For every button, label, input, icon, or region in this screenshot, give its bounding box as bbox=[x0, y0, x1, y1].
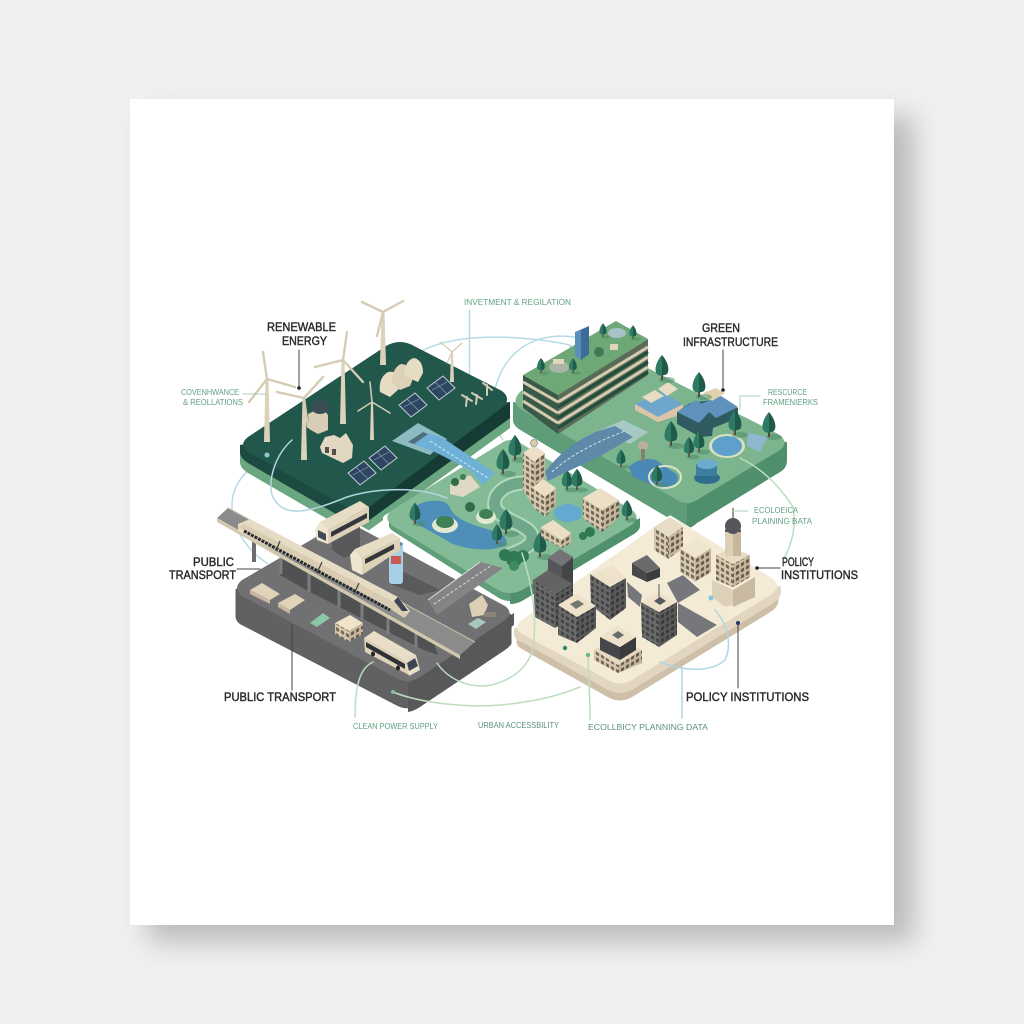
office block f bbox=[654, 517, 683, 559]
label: governance and regulations: COVENHWANCE bbox=[181, 388, 239, 397]
park trees bbox=[617, 355, 782, 487]
blue greenhouse buildings bbox=[677, 388, 738, 437]
city towers bbox=[523, 440, 619, 548]
heading: green infrastructure: GREEN bbox=[702, 321, 740, 335]
heading: policy institutions side: INSTITUTIONS bbox=[781, 568, 858, 582]
platform: renewable energy bbox=[240, 301, 510, 534]
high speed train bbox=[238, 519, 410, 618]
label: ecological planning data side: ECOLOEICA bbox=[754, 506, 799, 515]
heading: renewable energy: RENEWABLE bbox=[267, 320, 336, 334]
platform: central city park bbox=[386, 435, 640, 604]
heading: policy institutions side: POLICY bbox=[782, 555, 814, 569]
water bridges bbox=[392, 420, 648, 485]
central trees bbox=[410, 435, 637, 560]
label: ecological planning data bottom: ECOLLBICY PLANNING DATA bbox=[588, 723, 709, 732]
blue arc policy bbox=[660, 596, 728, 718]
platform small buildings bbox=[250, 583, 363, 642]
beige small plant bbox=[320, 433, 353, 463]
green label ticks bbox=[243, 394, 760, 511]
label: resource frameworks: RESCURCE bbox=[768, 388, 807, 397]
ramp road bbox=[428, 562, 503, 615]
bridge left bbox=[392, 423, 495, 485]
viaduct deck bbox=[217, 508, 475, 659]
billboard column bbox=[389, 542, 440, 595]
label: clean power supply: CLEAN POWER SUPPLY bbox=[353, 722, 439, 731]
heading: policy institutions bottom: POLICY INSTITUTIONS bbox=[686, 690, 809, 704]
central pond bbox=[410, 501, 582, 550]
small dark block bbox=[632, 555, 660, 582]
winding road bbox=[495, 483, 532, 556]
platform: policy institutions bbox=[514, 508, 781, 703]
solar panels bbox=[348, 376, 455, 485]
satellite dish building bbox=[308, 400, 329, 434]
rooftop details bbox=[537, 323, 640, 375]
label: resource frameworks: FRAMENIERKS bbox=[763, 398, 818, 407]
dark block e bbox=[641, 584, 677, 647]
bridge right bbox=[545, 420, 648, 481]
bus lower bbox=[364, 631, 420, 676]
label: urban accessibility: URBAN ACCESSBILITY bbox=[478, 721, 560, 730]
heading: green infrastructure: INFRASTRUCTURE bbox=[683, 335, 778, 349]
classical low building bbox=[594, 626, 642, 673]
office block g bbox=[680, 539, 711, 582]
label: governance and regulations: & REOLLATIONS bbox=[183, 398, 243, 407]
foliage cluster bbox=[499, 527, 595, 571]
beige storage domes bbox=[380, 358, 423, 397]
white card bbox=[130, 99, 894, 925]
pale roof building bbox=[635, 382, 683, 422]
connectors behind platforms bbox=[232, 310, 794, 568]
platform: public transport bbox=[217, 501, 514, 712]
rock garden bbox=[450, 474, 480, 497]
tall dark tower a bbox=[533, 549, 573, 628]
platform: green infrastructure bbox=[513, 321, 787, 528]
dark callout leader lines bbox=[237, 350, 780, 690]
dark block b bbox=[558, 593, 596, 643]
shuttle bus upper bbox=[315, 501, 369, 558]
heading: public transport side: TRANSPORT bbox=[169, 568, 237, 582]
blue arc from renewable to centre bbox=[264, 440, 447, 511]
service machinery bbox=[468, 595, 496, 629]
pools and water features bbox=[629, 433, 768, 488]
connector lines and nodes bbox=[237, 350, 793, 720]
dark block c bbox=[590, 565, 626, 620]
heading: renewable energy: ENERGY bbox=[282, 334, 327, 348]
label: ecological planning data side: PLAINING BATA bbox=[752, 517, 813, 526]
heading: public transport bottom: PUBLIC TRANSPORT bbox=[224, 690, 337, 704]
wind turbines bbox=[249, 301, 492, 460]
grey plaza roads bbox=[627, 575, 717, 637]
heading: public transport side: PUBLIC bbox=[193, 555, 234, 569]
viaduct arches bbox=[252, 540, 438, 655]
domed policy tower bbox=[712, 508, 755, 607]
striped green building bbox=[523, 321, 648, 434]
label: investment and regulation: INVETMENT & REGILATION bbox=[464, 298, 571, 307]
shuttle bus middle bbox=[350, 533, 400, 575]
green arcs bbox=[355, 458, 793, 720]
card shadow bbox=[148, 116, 914, 942]
